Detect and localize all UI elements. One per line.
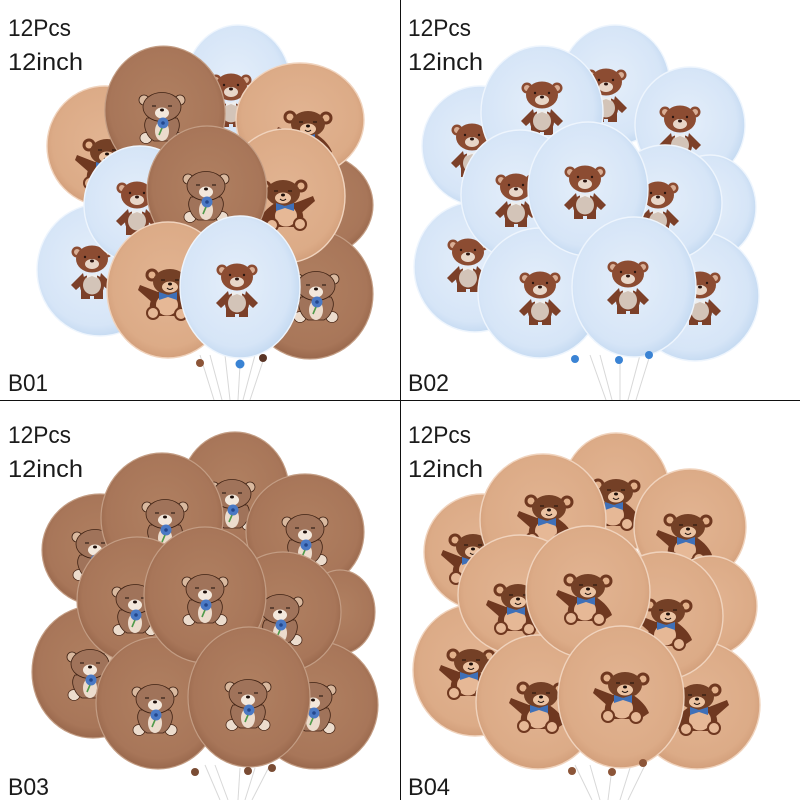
label: B04 size: 12inch (408, 456, 483, 483)
label: B02: B02 (408, 370, 449, 397)
label: B02 size (408, 15, 483, 76)
label: B04 size (408, 422, 483, 483)
panel: B02 blue balloons (414, 25, 759, 400)
label: B02 size: 12Pcs (408, 15, 471, 42)
label: B04 size: 12Pcs (408, 422, 471, 449)
label: B01 size (8, 15, 83, 76)
label: B02 size: 12inch (408, 49, 483, 76)
label: B03 size: 12Pcs (8, 422, 71, 449)
panel: B04 tan balloons (413, 433, 760, 800)
panel: B03 brown balloons (32, 432, 378, 800)
label: B03 size: 12inch (8, 456, 83, 483)
label: B01 size: 12inch (8, 49, 83, 76)
label: B01 size: 12Pcs (8, 15, 71, 42)
panel: B01 mixed balloons (37, 25, 373, 400)
label: B01: B01 (8, 370, 48, 397)
label: B03 size (8, 422, 83, 483)
